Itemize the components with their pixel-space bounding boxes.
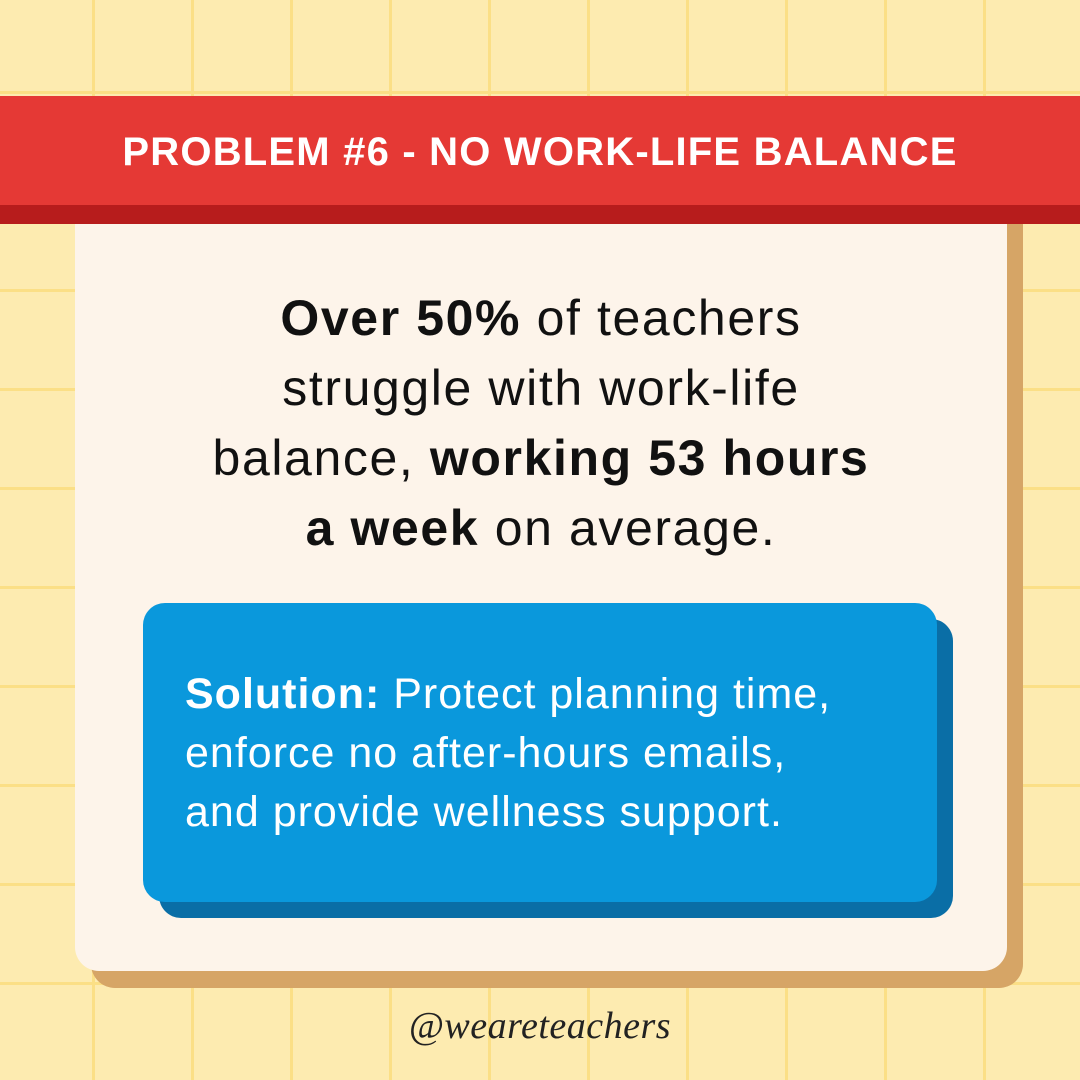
- solution text: [185, 670, 831, 836]
- solution text: and provide wellness support.: [185, 788, 783, 836]
- main statement: Over 50% of teachers: [280, 290, 802, 346]
- solution text: Solution: Protect planning time,: [185, 670, 831, 718]
- solution text: enforce no after-hours emails,: [185, 729, 786, 777]
- solution box shadow: [159, 619, 953, 918]
- main statement: struggle with work-life: [282, 360, 800, 416]
- handle: @weareteachers: [409, 1005, 671, 1047]
- card shadow: [91, 224, 1023, 988]
- main statement: [213, 290, 869, 556]
- main statement: a week on average.: [306, 500, 776, 556]
- solution box: [143, 603, 937, 902]
- main statement: balance, working 53 hours: [213, 430, 869, 486]
- banner: [0, 96, 1080, 224]
- banner: PROBLEM #6 - NO WORK-LIFE BALANCE: [122, 130, 958, 174]
- card: [75, 210, 1007, 971]
